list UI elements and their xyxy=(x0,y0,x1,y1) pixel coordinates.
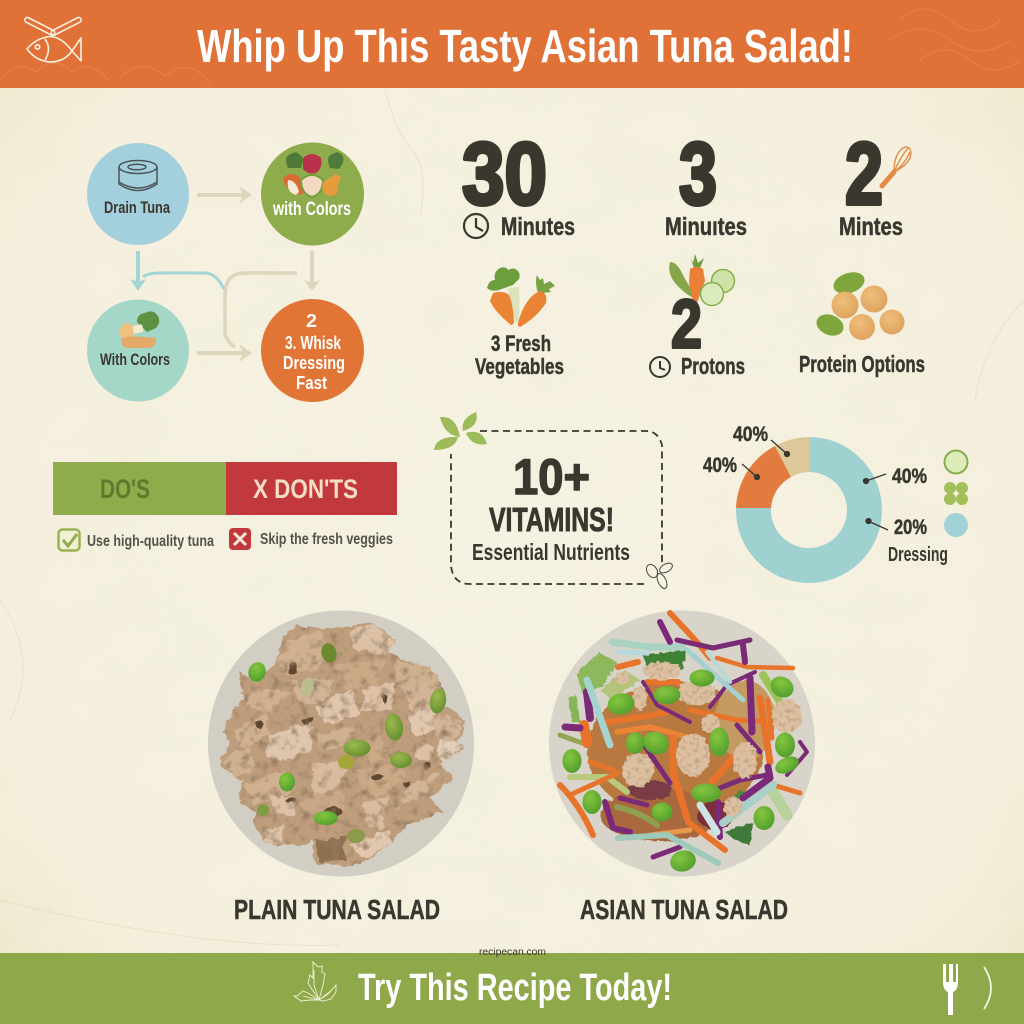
edamame xyxy=(562,670,801,875)
icon: pea pod, carrot, cucumber xyxy=(669,254,734,306)
don'ts banner xyxy=(226,462,397,515)
step: with colors teal: With Colors xyxy=(100,350,170,369)
icon: tuna can xyxy=(119,160,157,190)
salad base xyxy=(587,680,775,841)
step: with colors green: with Colors xyxy=(272,199,351,220)
step: with colors teal xyxy=(87,300,189,402)
icon: fish and chopsticks xyxy=(24,17,82,62)
icon: ribbon flourish xyxy=(644,561,674,590)
don't item xyxy=(229,528,393,550)
watermark: recipecan.com xyxy=(479,947,546,958)
flow diagram xyxy=(87,142,364,402)
plain tuna salad plate xyxy=(208,610,474,876)
pale cucumber strips xyxy=(560,642,787,825)
step: drain tuna: Drain Tuna xyxy=(104,198,170,217)
step: whisk dressing: Fast xyxy=(296,373,327,393)
donut chart: Dressing xyxy=(888,544,948,566)
donut chart: 40% xyxy=(892,465,927,488)
don't item: Skip the fresh veggies xyxy=(260,531,393,548)
title: Whip Up This Tasty Asian Tuna Salad! xyxy=(197,20,853,72)
stat: 2 protons: Protons xyxy=(681,353,745,379)
donut chart: 40% xyxy=(733,423,768,446)
header band xyxy=(0,0,1024,88)
leader lines xyxy=(742,440,888,530)
blue cucumber strips xyxy=(587,650,773,863)
icon: spoon arc xyxy=(984,967,991,1009)
stat: 3 fresh vegetables: 3 Fresh xyxy=(491,331,551,356)
step: whisk dressing: 2 xyxy=(306,311,317,331)
callout: vitamins xyxy=(434,412,674,590)
icon: whisk xyxy=(882,147,911,186)
donut chart: 20% xyxy=(894,516,927,539)
step: with colors green xyxy=(261,142,364,246)
donut segments xyxy=(736,437,882,583)
asian tuna salad plate xyxy=(549,610,815,876)
icon: clock xyxy=(464,214,488,238)
label: plain tuna salad: PLAIN TUNA SALAD xyxy=(234,894,440,925)
stat: 30 minutes: 30 xyxy=(462,124,547,223)
arrows between steps xyxy=(130,186,320,362)
do item xyxy=(58,530,214,550)
tuna chunks xyxy=(615,662,802,817)
stat: 3 minutes xyxy=(665,124,747,241)
icon: leaf outline xyxy=(294,962,336,1001)
stat: 2 mintes: Mintes xyxy=(839,213,903,241)
donut chart xyxy=(703,423,968,583)
icon: tuna and herbs xyxy=(120,311,159,348)
icon: leaves xyxy=(434,412,487,450)
donut chart: 40% xyxy=(703,454,737,477)
tuna mound xyxy=(218,620,467,867)
icon: chickpeas and beans xyxy=(813,269,904,340)
legend icons xyxy=(944,450,968,537)
icon: clock xyxy=(650,357,670,377)
stat: protein options xyxy=(799,269,925,377)
do's banner: DO'S xyxy=(100,474,150,504)
stat: 3 minutes: 3 xyxy=(679,124,717,223)
stat: 30 minutes: Minutes xyxy=(501,213,575,241)
lettuce xyxy=(568,650,753,845)
icon: carrots xyxy=(487,267,555,327)
callout: vitamins: Essential Nutrients xyxy=(472,539,630,565)
stat: 2 protons: 2 xyxy=(671,286,702,362)
step: whisk dressing: 3. Whisk xyxy=(285,333,342,353)
step: whisk dressing xyxy=(261,299,364,402)
do's banner xyxy=(53,462,226,515)
step: drain tuna xyxy=(87,143,189,245)
icon: vegetables xyxy=(283,152,343,197)
do item: Use high-quality tuna xyxy=(87,533,214,550)
icon: fork xyxy=(943,964,958,1015)
callout: vitamins: 10+ xyxy=(513,449,590,505)
dark crevices xyxy=(256,663,431,817)
stat: 3 minutes: Minuıtes xyxy=(665,213,747,241)
stat: 2 mintes: 2 xyxy=(845,124,883,223)
stat: protein options: Protein Options xyxy=(799,351,925,377)
shredded orange carrot xyxy=(560,613,800,850)
stat: 2 protons xyxy=(650,254,745,379)
callout: vitamins: VITAMINS! xyxy=(489,501,614,538)
call to action: Try This Recipe Today! xyxy=(358,967,672,1009)
don'ts banner: X DON'TS xyxy=(253,474,358,504)
label: asian tuna salad: ASIAN TUNA SALAD xyxy=(580,894,788,925)
do's and don'ts xyxy=(53,462,397,550)
stat: 2 mintes xyxy=(839,124,911,241)
edamame xyxy=(246,641,448,843)
stats grid xyxy=(462,124,925,379)
step: whisk dressing: Dressing xyxy=(283,353,345,373)
stat: 3 fresh vegetables xyxy=(475,267,564,379)
stat: 3 fresh vegetables: Vegetables xyxy=(475,354,564,379)
shredded purple cabbage xyxy=(565,622,807,857)
footer band xyxy=(0,947,1024,1024)
